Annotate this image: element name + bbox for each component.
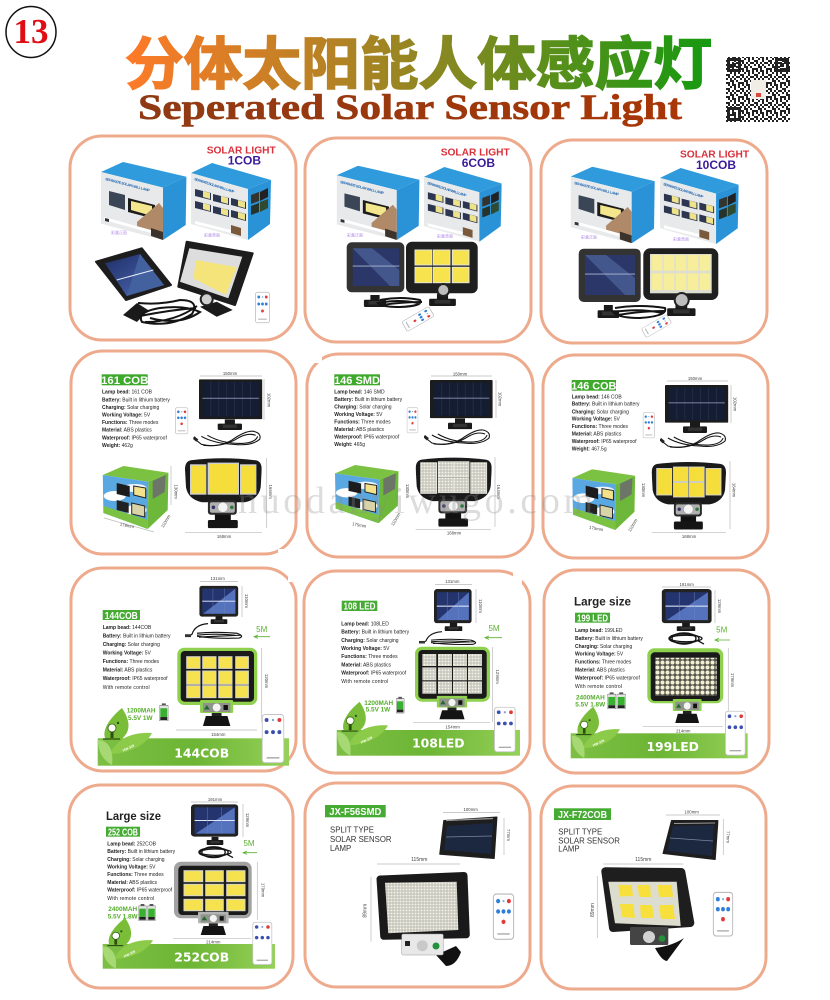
- 5M cable length: 5M: [256, 625, 268, 634]
- tag: JX-F56SMD: JX-F56SMD: [329, 807, 381, 818]
- specification list: With remote control: [107, 896, 154, 902]
- catalogue number badge: [6, 6, 56, 58]
- panel: 144COB spec: [71, 568, 296, 771]
- retail box back: 彩盒背面: [673, 236, 689, 242]
- specification list: Material: ABS plastics: [575, 668, 625, 674]
- panel frame: [541, 140, 767, 343]
- specification list: Lamp bead: 146 SMD: [334, 389, 385, 395]
- green model band: 108LED: [412, 736, 465, 751]
- solar panel with cable and dimensions: [185, 576, 249, 638]
- specification list: [107, 841, 176, 902]
- battery capacity: [575, 692, 626, 709]
- specification list: Working Voltage: 5V: [334, 412, 383, 418]
- remote control: [641, 314, 672, 338]
- description: [558, 827, 620, 854]
- battery capacity: 5.5V 1W: [128, 715, 153, 722]
- specification list: Waterproof: IP65 waterproof: [334, 434, 400, 440]
- silver frame lamp with dimensions: 214mm: [206, 940, 221, 944]
- specification list: [103, 625, 171, 691]
- green frame dense LED lamp with dimensions: 214mm: [676, 728, 691, 734]
- specification list: Charging: Solar charging: [107, 857, 165, 863]
- specification list: Functions: Three modes: [575, 660, 632, 666]
- solar panel with dimensions: 150mm: [688, 376, 703, 381]
- watermark: nuodanyiwugo.com: [238, 480, 593, 522]
- panel frame: [305, 138, 531, 342]
- leaf emblem: [98, 708, 152, 765]
- remote control: [493, 894, 514, 939]
- SMD lamp with dimensions: [363, 857, 466, 966]
- green retail box with dimensions: [572, 469, 646, 533]
- panel: 1COB product: [70, 136, 296, 340]
- leaf emblem: [337, 702, 388, 756]
- specification list: Battery: Built in lithium battery: [103, 633, 171, 639]
- specification list: [334, 389, 403, 448]
- specification list: Material: ABS plastics: [103, 667, 153, 673]
- green retail box with dimensions: 130mm: [405, 484, 410, 499]
- heading: solar light: SOLAR LIGHT: [441, 148, 511, 159]
- specification list: Charging: Solar charging: [572, 409, 629, 415]
- specification list: Charging: Solar charging: [102, 405, 159, 411]
- description: SOLAR SENSOR: [330, 835, 392, 844]
- specification list: Material: ABS plastics: [572, 431, 622, 437]
- specification list: Functions: Three modes: [102, 420, 159, 426]
- catalogue number badge: 13: [14, 12, 48, 51]
- green frame LED lamp with dimensions: 154mm: [446, 724, 460, 730]
- solar panel with cable and dimensions: [419, 579, 483, 645]
- QR code: [726, 57, 790, 122]
- specification list: Charging: Solar charging: [341, 638, 399, 644]
- leaf emblem: [103, 918, 153, 969]
- solar panel with dimensions: [663, 810, 731, 859]
- specification list: Working Voltage: 5V: [575, 652, 624, 658]
- battery capacity: [108, 904, 156, 921]
- solar panel with dimensions: 150mm: [453, 372, 468, 376]
- remote control: [262, 715, 284, 763]
- battery capacity: 5.5V 1.8W: [575, 702, 606, 709]
- green frame lamp with dimensions: [176, 648, 269, 737]
- lamp with COB panel: [178, 242, 253, 317]
- cable coil: [378, 298, 422, 307]
- silver frame lamp with dimensions: 179mm: [261, 883, 266, 898]
- description: [330, 826, 392, 853]
- remote control: [407, 408, 418, 433]
- solar panel: [347, 242, 404, 307]
- solar panel with dimensions: 100mm: [464, 807, 478, 812]
- solar panel with cable and dimensions: [662, 582, 722, 644]
- green model band: 199LED: [646, 739, 699, 754]
- specification list: Waterproof: IP65 waterproof: [575, 676, 640, 682]
- specification list: Battery: Built in lithium battery: [334, 397, 403, 403]
- specification list: Waterproof: IP65 waterproof: [102, 435, 167, 441]
- specification list: Working Voltage: 5V: [107, 864, 156, 870]
- specification list: Weight: 467.5g: [572, 446, 607, 452]
- solar panel with cable and dimensions: 129mm: [717, 599, 722, 614]
- heading: solar light: SOLAR LIGHT: [207, 145, 277, 156]
- green retail box with dimensions: [335, 465, 410, 529]
- remote control: [643, 413, 655, 438]
- 5M cable length: [485, 624, 502, 639]
- title: English: Seperated Solar Sensor Light: [138, 87, 682, 127]
- retail box front: SEPARATE SOLAR WALL LAMP: [574, 181, 620, 197]
- solar panel with cable and dimensions: 191mm: [680, 582, 694, 587]
- specification list: Functions: Three modes: [334, 420, 391, 426]
- three-panel lamp with dimensions: [185, 458, 273, 539]
- retail box front: [337, 166, 419, 240]
- specification list: Waterproof: IP65 waterproof: [572, 439, 637, 445]
- retail box front: [571, 167, 655, 243]
- battery capacity: 5.5V 1W: [366, 707, 391, 714]
- specification list: With remote control: [103, 685, 150, 691]
- retail box back: 彩盒背面: [437, 232, 453, 238]
- specification list: Working Voltage: 5V: [103, 650, 152, 656]
- panel: 146 COB spec: [543, 355, 768, 558]
- panel: 161 COB spec: [71, 351, 296, 556]
- green frame lamp with dimensions: 154mm: [211, 732, 226, 737]
- panel frame: [307, 354, 533, 557]
- remote control: [713, 892, 733, 936]
- 5M cable length: 5M: [488, 624, 500, 633]
- solar panel with dimensions: 100mm: [685, 810, 699, 814]
- heading: solar light: SOLAR LIGHT: [680, 150, 750, 161]
- panel frame: [544, 570, 769, 773]
- green retail box with dimensions: 130mm: [174, 485, 178, 499]
- green retail box with dimensions: 110mm: [390, 512, 402, 527]
- panel frame: [71, 568, 296, 771]
- SMD lamp with dimensions: 115mm: [411, 857, 427, 863]
- green model band: [337, 730, 520, 756]
- green model band: [571, 733, 748, 758]
- four-block COB lamp with dimensions: [652, 461, 736, 539]
- solar panel with cable and dimensions: [191, 797, 250, 858]
- specification list: Lamp bead: 108LED: [341, 621, 389, 627]
- remote control: [255, 292, 270, 323]
- 5M cable length: [243, 839, 257, 854]
- panel: 10COB product: [541, 140, 767, 343]
- retail box front: SEPARATE SOLAR WALL LAMP: [105, 177, 151, 193]
- specification list: Battery: Built in lithium battery: [572, 402, 640, 408]
- solar panel with cable and dimensions: 110mm: [478, 599, 483, 613]
- description: LAMP: [330, 844, 351, 853]
- specification list: Weight: 462g: [102, 443, 133, 449]
- battery capacity: [364, 697, 404, 714]
- panel: 252 COB spec: [69, 785, 293, 988]
- retail box front: [101, 162, 186, 240]
- tag: JX-F72COB: JX-F72COB: [558, 810, 607, 821]
- panel: JX-F72COB: [541, 786, 766, 989]
- battery capacity: 1200MAH: [364, 700, 393, 707]
- green frame dense LED lamp with dimensions: 179mm: [730, 673, 735, 688]
- specification list: [575, 628, 643, 690]
- specification list: Functions: Three modes: [103, 659, 160, 665]
- specification list: Battery: Built in lithium battery: [102, 397, 170, 403]
- specification list: Functions: Three modes: [572, 424, 629, 430]
- leaf emblem: HW-339: [122, 744, 135, 753]
- four-block COB lamp with dimensions: 164mm: [732, 483, 736, 498]
- retail box back: [424, 167, 502, 242]
- tag: 108 LED: 108 LED: [344, 602, 376, 613]
- battery capacity: 2400MAH: [576, 694, 605, 701]
- specification list: Battery: Built in lithium battery: [107, 849, 176, 855]
- green model band: 252COB: [174, 950, 229, 965]
- specification list: Battery: Built in lithium battery: [341, 630, 410, 636]
- 5M cable length: 5M: [716, 626, 728, 635]
- specification list: [341, 621, 410, 685]
- tag: 146 SMD: 146 SMD: [334, 375, 380, 387]
- specification list: With remote control: [341, 679, 388, 685]
- panel: 199 LED spec: [544, 570, 769, 773]
- battery capacity: 5.5V 1.8W: [108, 913, 139, 920]
- solar panel with cable and dimensions: 131mm: [445, 579, 460, 584]
- remote control: [253, 922, 272, 965]
- remote control: [175, 408, 188, 434]
- green retail box with dimensions: 175mm: [589, 525, 604, 532]
- COB lamp with dimensions: [590, 857, 690, 961]
- solar panel with dimensions: 102mm: [498, 392, 502, 407]
- specification list: Working Voltage: 5V: [341, 646, 390, 652]
- remote control: [402, 306, 434, 332]
- panel: 108 LED spec: [304, 569, 530, 773]
- battery capacity: 1200MAH: [127, 707, 156, 714]
- panel frame: [541, 786, 766, 989]
- battery capacity: [127, 703, 168, 722]
- large size heading: Large size: [574, 597, 631, 609]
- specification list: With remote control: [575, 684, 622, 690]
- tag: 161 COB: 161 COB: [101, 375, 148, 387]
- specification list: Working Voltage: 5V: [102, 412, 151, 418]
- specification list: Lamp bead: 146 COB: [572, 394, 622, 400]
- cable coil: [613, 306, 665, 318]
- solar panel with dimensions: [440, 807, 511, 858]
- solar panel with dimensions: 102mm: [266, 393, 272, 408]
- tag: 252 COB: [106, 827, 140, 838]
- retail box front: 彩盒正面: [347, 232, 363, 238]
- solar panel with dimensions: [423, 372, 502, 444]
- panel frame: [69, 785, 293, 988]
- specification list: Charging: Solar charging: [334, 405, 392, 411]
- remote control: [725, 711, 745, 755]
- specification list: Functions: Three modes: [341, 654, 398, 660]
- tag: 252 COB: 252 COB: [108, 828, 138, 838]
- green frame lamp with dimensions: 120mm: [264, 674, 269, 689]
- COB lamp with dimensions: 115mm: [635, 857, 651, 863]
- remote control: [494, 707, 515, 752]
- green frame LED lamp with dimensions: 129mm: [495, 670, 500, 684]
- COB lamp with dimensions: 89mm: [590, 903, 596, 917]
- solar panel with dimensions: 77mm: [726, 831, 731, 843]
- retail box back: SEPARATE SOLAR WALL LAMP: [427, 181, 467, 198]
- green model band: [98, 738, 289, 766]
- green retail box with dimensions: 110mm: [160, 514, 172, 529]
- specification list: Waterproof: IP65 waterproof: [107, 888, 173, 894]
- retail box front: SEPARATE SOLAR WALL LAMP: [340, 180, 385, 195]
- panel frame: [543, 355, 768, 558]
- panel frame: [304, 571, 530, 773]
- solar panel with dimensions: [659, 376, 738, 447]
- tag: 199 LED: 199 LED: [577, 614, 608, 624]
- specification list: Battery: Built in lithium battery: [575, 636, 643, 642]
- solar panel with cable and dimensions: 191mm: [208, 797, 223, 802]
- specification list: Waterproof: IP65 waterproof: [103, 676, 168, 682]
- specification list: Lamp bead: 144COB: [103, 625, 152, 631]
- heading: 10COB: 10COB: [696, 158, 736, 172]
- description: SOLAR SENSOR: [558, 836, 620, 845]
- green model band: [103, 944, 275, 969]
- specification list: Functions: Three modes: [107, 872, 164, 878]
- description: LAMP: [558, 845, 580, 854]
- tag: 144COB: 144COB: [105, 611, 138, 622]
- specification list: Working Voltage: 5V: [572, 417, 621, 423]
- green retail box with dimensions: [103, 466, 178, 532]
- specification list: Material: ABS plastics: [107, 880, 158, 886]
- cable coil: [138, 300, 200, 324]
- SMD lamp with dimensions: 89mm: [363, 904, 369, 918]
- three-panel lamp with dimensions: 166mm: [268, 485, 273, 499]
- panel: 146 SMD spec: [307, 354, 533, 557]
- heading: 6COB: 6COB: [462, 156, 495, 170]
- solar panel with cable and dimensions: 131mm: [211, 576, 225, 581]
- panel frame: [71, 351, 296, 554]
- retail box back: SEPARATE SOLAR WALL LAMP: [663, 182, 704, 199]
- retail box back: SEPARATE SOLAR WALL LAMP: [194, 177, 235, 194]
- specification list: Lamp bead: 161 COB: [102, 389, 153, 395]
- solar panel with cable and dimensions: 129mm: [245, 813, 250, 828]
- description: SPLIT TYPE: [330, 826, 374, 835]
- tag: 146 COB: 146 COB: [571, 380, 617, 392]
- green retail box with dimensions: 175mm: [352, 521, 367, 529]
- LED lamp with dimensions: 164mm: [496, 485, 501, 499]
- description: SPLIT TYPE: [558, 827, 602, 836]
- retail box back: [660, 168, 739, 244]
- specification list: Charging: Solar charging: [575, 644, 632, 650]
- green retail box with dimensions: 179mm: [119, 522, 135, 529]
- leaf emblem: HW-339: [592, 739, 605, 748]
- specification list: Lamp bead: 199LED: [575, 628, 623, 634]
- retail box back: 彩盒背面: [204, 232, 220, 238]
- specification list: Material: ABS plastics: [334, 427, 385, 433]
- title: Chinese: 分体太阳能人体感应灯: [125, 33, 712, 97]
- solar panel with dimensions: 77mm: [506, 829, 511, 841]
- solar panel: [579, 249, 641, 318]
- specification list: Charging: Solar charging: [103, 642, 160, 648]
- LED lamp with dimensions: [416, 457, 501, 536]
- specification list: Material: ABS plastics: [102, 428, 152, 434]
- retail box back: [191, 163, 271, 240]
- leaf emblem: HW-339: [360, 736, 373, 745]
- 5M cable length: [715, 626, 730, 642]
- specification list: Weight: 465g: [334, 442, 365, 448]
- three-panel lamp with dimensions: 168mm: [217, 534, 232, 539]
- specification list: [102, 389, 170, 449]
- green retail box with dimensions: 130mm: [641, 483, 646, 498]
- panel frame: [70, 136, 296, 340]
- 5M cable length: [254, 625, 270, 638]
- solar panel with dimensions: 150mm: [223, 371, 238, 376]
- green frame dense LED lamp with dimensions: [643, 648, 735, 734]
- panel: JX-F56SMD: [305, 783, 530, 987]
- battery capacity: 2400MAH: [108, 906, 137, 913]
- large size heading: Large size: [106, 811, 161, 823]
- lamp with 10 COB cells: [643, 248, 718, 316]
- solar panel: [96, 248, 171, 322]
- LED lamp with dimensions: 168mm: [447, 530, 462, 536]
- green retail box with dimensions: 110mm: [627, 518, 639, 533]
- panel frame: [305, 783, 530, 987]
- lamp with 6 COB cells: [406, 242, 478, 306]
- leaf emblem: HW-339: [123, 950, 136, 959]
- specification list: Material: ABS plastics: [341, 662, 392, 668]
- solar panel with cable and dimensions: 110mm: [244, 594, 249, 608]
- retail box front: 彩盒正面: [111, 229, 127, 235]
- specification list: Lamp bead: 252COB: [107, 841, 157, 847]
- 5M cable length: 5M: [243, 839, 255, 848]
- panel: 6COB product: [305, 138, 531, 342]
- solar panel with dimensions: [192, 371, 272, 446]
- heading: 1COB: 1COB: [228, 153, 261, 167]
- silver frame lamp with dimensions: [173, 862, 266, 944]
- green model band: 144COB: [174, 746, 229, 761]
- specification list: Waterproof: IP65 waterproof: [341, 670, 407, 676]
- retail box front: 彩盒正面: [581, 233, 597, 239]
- specification list: [572, 394, 640, 452]
- four-block COB lamp with dimensions: 168mm: [682, 534, 697, 539]
- leaf emblem: [572, 707, 620, 758]
- solar panel with dimensions: 102mm: [732, 397, 738, 412]
- green frame LED lamp with dimensions: [413, 647, 500, 730]
